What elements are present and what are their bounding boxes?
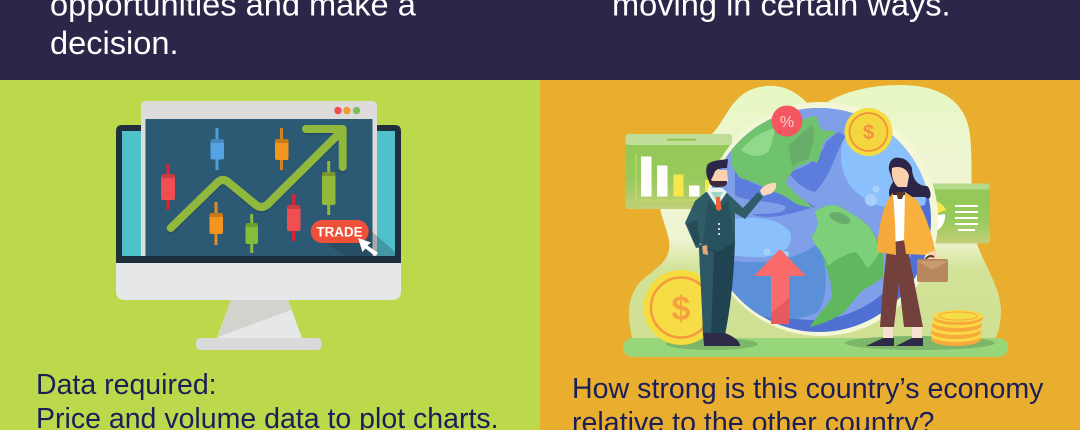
- globe: [700, 102, 938, 336]
- chart card left: [626, 134, 732, 209]
- header band: [0, 0, 1080, 80]
- ground: [623, 338, 1008, 357]
- jacket: [685, 192, 763, 252]
- shirt and tie: [707, 188, 727, 207]
- man in suit: [685, 159, 776, 346]
- illustration: business people and globe: [623, 85, 1008, 357]
- trade button with cursor: TRADE: [316, 224, 362, 240]
- jacket: [877, 193, 896, 255]
- trousers: [699, 240, 735, 335]
- icon: dollar coin bottom: $: [672, 290, 691, 328]
- hands: [760, 183, 776, 196]
- background blob: [629, 85, 1001, 342]
- icon: dollar coin top: [844, 108, 892, 156]
- icon: percent badge: %: [780, 114, 794, 131]
- hand: [927, 250, 937, 261]
- candlesticks: [161, 128, 336, 253]
- hair: [889, 158, 931, 199]
- icon: percent badge: [772, 106, 802, 136]
- icon: computer monitor with trading chart: [116, 101, 401, 350]
- briefcase: [917, 256, 948, 282]
- face: [892, 167, 909, 187]
- icon: dollar coin top: $: [863, 122, 874, 144]
- right panel text: How strong is this country’s economy: [572, 373, 1043, 405]
- woman with briefcase: [866, 158, 948, 346]
- continent: South America: [810, 205, 883, 327]
- shirt: [893, 195, 906, 242]
- arrow: red up arrow: [754, 186, 880, 324]
- left panel text: Data required:: [36, 369, 217, 401]
- monitor body: [116, 263, 401, 300]
- trade button with cursor: [311, 220, 395, 256]
- trousers: [880, 240, 923, 327]
- head: [712, 170, 728, 187]
- arrow: rising trend line: [171, 129, 343, 230]
- info card right: [917, 184, 990, 244]
- left header text: decision.: [50, 24, 179, 61]
- continent: North America: [731, 116, 836, 208]
- icon: coin stack: [931, 310, 983, 346]
- browser window: [141, 101, 377, 256]
- shoes: [703, 333, 740, 346]
- monitor stand: [196, 300, 322, 350]
- panel: fundamental analysis: [540, 80, 1080, 430]
- panel: technical analysis: [0, 80, 540, 430]
- icon: dollar coin bottom: [644, 270, 718, 345]
